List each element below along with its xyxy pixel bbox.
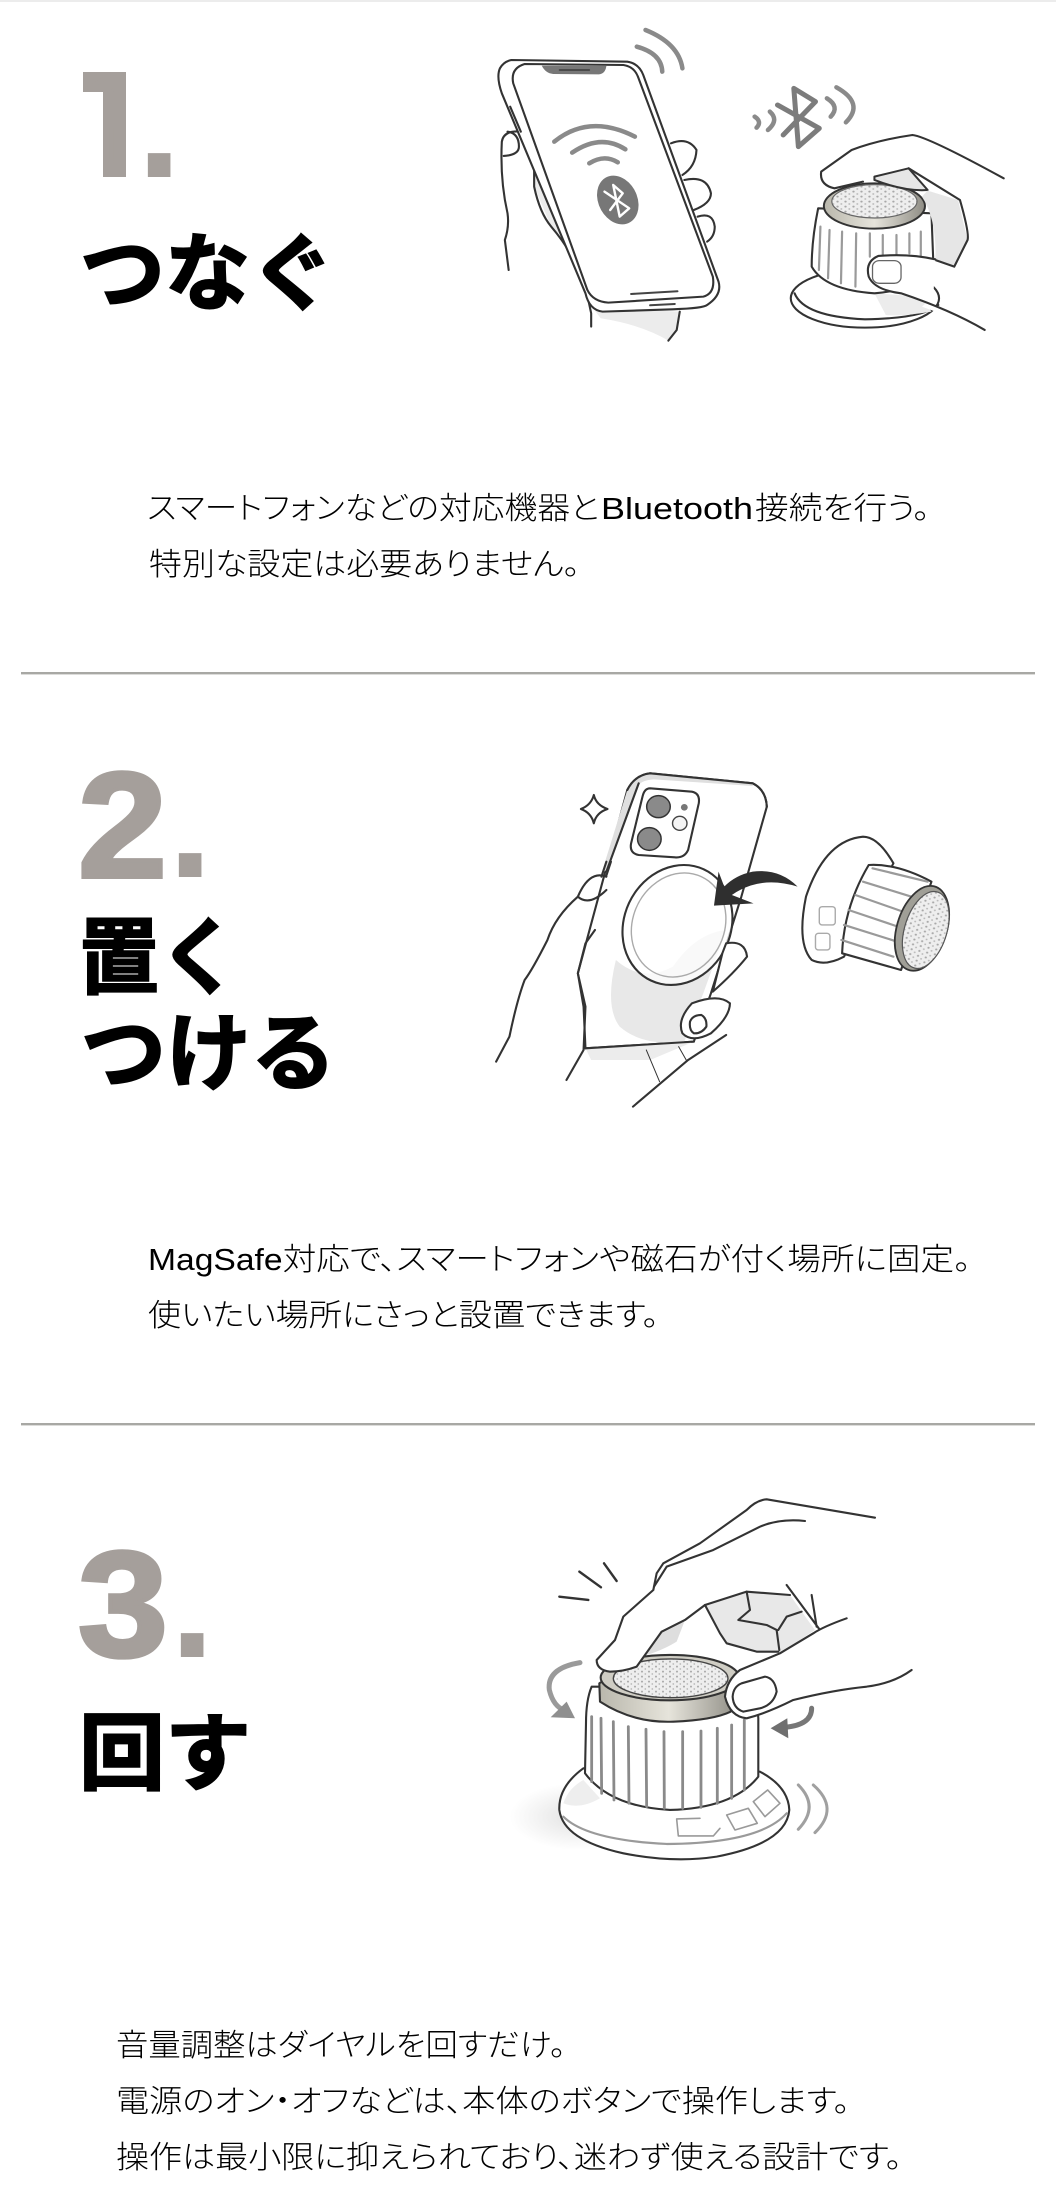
- icon: MagSafe ring: [608, 855, 747, 995]
- step number 1: [83, 72, 170, 177]
- arrow: curved toward phone: [714, 871, 798, 906]
- icon: hand on knob: [821, 135, 1004, 330]
- heading: 置く: 置く: [79, 891, 239, 1012]
- illustration: turning the knob: [510, 1499, 912, 1859]
- body text: step 3: 操作は最小限に抑えられており、迷わず使える設計です。: [116, 2140, 902, 2175]
- step number 1: .: [137, 32, 181, 211]
- body text: step 1: Bluetooth: [601, 491, 753, 526]
- step number 3: .: [170, 1512, 214, 1691]
- panel: step 2 place: [78, 732, 971, 1333]
- icon: phone back with camera: [578, 773, 767, 1048]
- icon: hand holding phone: [496, 875, 747, 1107]
- arrow: left rotation: [549, 1663, 580, 1718]
- step number 3: 3: [78, 1520, 168, 1688]
- body text: step 3: 音量調整はダイヤルを回すだけ。: [116, 2028, 566, 2063]
- icon: hand turning knob: [597, 1499, 912, 1718]
- icon: sparkle: [581, 795, 608, 823]
- icon: hand behind phone: [501, 131, 715, 341]
- illustration: phone in hand and knob pairing via Bluetooth: [498, 30, 1004, 341]
- arrow: right rotation: [771, 1708, 812, 1738]
- panel: step 3 turn: [78, 1499, 912, 2175]
- body text: step 3: 電源のオン・オフなどは、本体のボタンで操作します。: [116, 2084, 850, 2119]
- icon: knob ribbed body: [585, 1687, 758, 1810]
- body text: step 2: MagSafe対応で、スマートフォンや磁石が付く場所に固定。: [148, 1242, 971, 1277]
- icon: smartphone: [498, 60, 719, 312]
- icon: vibration lines: [798, 1785, 827, 1833]
- body text: step 1: 接続を行う。: [755, 491, 930, 526]
- body text: step 1: スマートフォンなどの対応機器と: [147, 491, 599, 526]
- icon: base shadow: [510, 1783, 643, 1850]
- icon: signal waves above phone: [637, 30, 682, 72]
- icon: wifi waves on screen: [554, 126, 635, 163]
- body text: step 2: [148, 1242, 971, 1333]
- step number 1: 1: [74, 41, 164, 209]
- icon: Bluetooth badge on screen: [590, 171, 645, 229]
- icon: hand shadow: [611, 930, 726, 1043]
- body text: step 1: [147, 491, 930, 582]
- icon: knob metal ring and top: [599, 1655, 739, 1722]
- icon: knob speaker tilted: [802, 837, 958, 976]
- icon: Bluetooth symbol with waves: [755, 87, 854, 147]
- heading: つける: つける: [81, 987, 336, 1108]
- step number 2: [78, 732, 212, 911]
- body text: step 2: 使いたい場所にさっと設置できます。: [148, 1298, 659, 1333]
- icon: knob base: [559, 1768, 789, 1859]
- icon: click tick marks: [559, 1563, 617, 1600]
- illustration: attaching knob to phone back: [496, 773, 958, 1107]
- body text: step 3: [116, 2028, 902, 2175]
- step number 3: [78, 1512, 214, 1691]
- body text: step 1: 特別な設定は必要ありません。: [149, 547, 580, 582]
- icon: knob speaker: [791, 183, 939, 328]
- panel: step 1 connect: [74, 30, 1004, 582]
- heading: 回す: 回す: [79, 1687, 251, 1808]
- step number 2: .: [168, 732, 212, 911]
- step number 2: 2: [78, 741, 167, 909]
- heading: つなぐ: つなぐ: [80, 207, 335, 328]
